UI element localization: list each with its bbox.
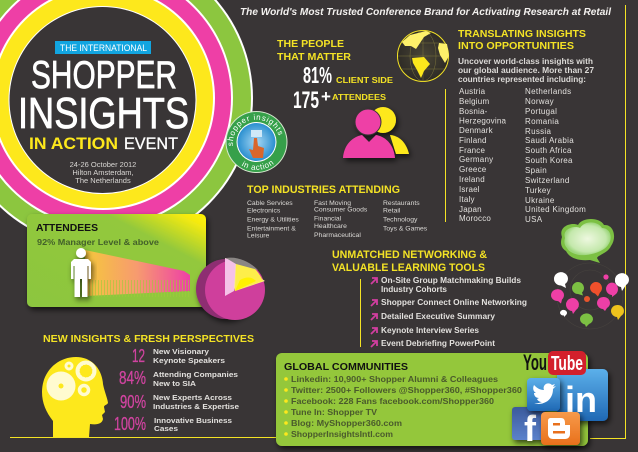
- event title: INSIGHTS: [18, 89, 189, 138]
- event title: SHOPPER: [31, 54, 177, 97]
- people gradient row: [85, 250, 190, 297]
- country list column 2: Saudi Arabia: [525, 136, 574, 145]
- icon: person: [71, 248, 91, 297]
- event date and venue: The Netherlands: [75, 176, 131, 185]
- community list: Tune In: Shopper TV: [291, 407, 377, 417]
- stats: new insights numbers: [114, 346, 146, 434]
- heading: unmatched networking: VALUABLE LEARNING TOOLS: [332, 262, 485, 274]
- country list column 1: Belgium: [459, 97, 489, 106]
- stats: new insights numbers: 90%: [120, 392, 146, 412]
- attendees heading: ATTENDEES: [36, 222, 98, 234]
- country list column 2: Norway: [525, 97, 554, 106]
- top strapline: The World's Most Trusted Conference Brand for Activating Research at Retail: [240, 6, 612, 18]
- country list column 2: Spain: [525, 166, 547, 175]
- heading: the people that matter: THE PEOPLE: [277, 38, 344, 50]
- logo roundel: concentric rings: [0, 0, 253, 248]
- stats: new insights numbers: 84%: [119, 368, 146, 388]
- industries column 2: Consumer Goods: [314, 206, 368, 214]
- industries column 3: [383, 200, 428, 232]
- country list column 1: Italy: [459, 195, 475, 204]
- stats: new insights labels: Keynote Speakers: [153, 356, 225, 365]
- heading: the people that matter: [277, 38, 351, 63]
- pie chart: [196, 258, 265, 320]
- badge: shopper insights in action: in action: [242, 160, 274, 170]
- stat: 175+ attendees: [293, 87, 387, 114]
- icon: twitter: [527, 378, 560, 411]
- country list column 1: Austria: [459, 87, 486, 96]
- country list column 1: Denmark: [459, 126, 494, 135]
- divider lines: [360, 5, 626, 438]
- stats: new insights labels: Cases: [154, 424, 178, 433]
- heading: unmatched networking: [332, 249, 487, 274]
- community list: Twitter: 2500+ Followers @Shopper360, #Shopper360: [291, 385, 522, 395]
- stat: 175+ attendees: 175: [293, 87, 319, 114]
- stats: new insights numbers: 100%: [114, 414, 146, 434]
- stat: 81% client side: 81%: [303, 62, 332, 88]
- badge: shopper insights in action: shopper insights: [227, 114, 282, 146]
- icon: youtube: You: [523, 350, 547, 375]
- badge: shopper insights in action: [226, 111, 288, 173]
- community list: Facebook: 228 Fans facebook.com/Shopper360: [291, 396, 494, 406]
- country list column 1: Finland: [459, 136, 487, 145]
- event title: EVENT: [124, 135, 178, 153]
- icon: green cloud: [561, 219, 614, 263]
- networking bullet list: Event Debriefing PowerPoint: [381, 339, 495, 348]
- heading: the people that matter: THAT MATTER: [277, 51, 351, 63]
- country list column 2: Romania: [525, 117, 559, 126]
- speech bubbles cluster: [551, 263, 629, 329]
- icon: head with gears: [42, 357, 108, 437]
- heading: translating insights: [458, 28, 586, 52]
- country list column 2: [525, 87, 586, 224]
- icon: facebook: [512, 407, 545, 449]
- stats: new insights labels: Industries & Expertise: [153, 402, 239, 411]
- networking bullet list: On-Site Group Matchmaking Builds: [381, 276, 522, 285]
- country list column 2: South Africa: [525, 146, 572, 155]
- event title: IN ACTION: [29, 135, 118, 153]
- country list column 1: Bosnia-: [459, 107, 488, 116]
- country list column 1: Japan: [459, 205, 482, 214]
- industries column 1: Entertainment &: [247, 226, 296, 232]
- country list column 2: United Kingdom: [525, 205, 586, 214]
- country list column 2: Ukraine: [525, 196, 555, 205]
- icon: youtube: Tube: [551, 353, 583, 375]
- industries column 2: Healthcare: [314, 223, 347, 230]
- country list column 1: Greece: [459, 165, 487, 174]
- industries column 3: Technology: [383, 216, 418, 224]
- global audience text: our global audience. More than 27: [458, 66, 595, 75]
- event title: [18, 41, 189, 153]
- industries column 1: Cable Services: [247, 200, 293, 207]
- industries column 1: Leisure: [247, 232, 270, 240]
- panel: global communities: [276, 353, 588, 446]
- country list column 2: USA: [525, 215, 543, 224]
- global audience text: Uncover world-class insights with: [458, 57, 593, 66]
- base line: [10, 436, 277, 438]
- global communities heading: GLOBAL COMMUNITIES: [284, 361, 408, 373]
- networking bullet list: Industry Cohorts: [381, 285, 448, 294]
- networking bullet list: Keynote Interview Series: [381, 326, 480, 335]
- global audience text: [458, 57, 595, 84]
- community list: Blog: MyShopper360.com: [291, 418, 402, 428]
- country list column 1: Morocco: [459, 214, 491, 223]
- global audience text: countries represented including:: [458, 75, 586, 84]
- heading: translating insights: TRANSLATING INSIGHTS: [458, 28, 586, 40]
- country list column 2: Turkey: [525, 186, 551, 195]
- community list: Linkedin: 10,900+ Shopper Alumni & Colleagues: [291, 374, 498, 384]
- icon: facebook: f: [524, 408, 537, 449]
- industries column 2: [314, 200, 368, 239]
- networking bullet list: [371, 276, 527, 348]
- heading: new insights: NEW INSIGHTS & FRESH PERSPECTIVES: [43, 333, 254, 345]
- country list column 2: Switzerland: [525, 176, 570, 185]
- stat: 81% client side: CLIENT SIDE: [336, 76, 394, 85]
- stats: new insights labels: Attending Companies: [153, 370, 238, 379]
- stats: new insights labels: Innovative Business: [154, 416, 232, 425]
- industries column 1: Electronics: [247, 208, 281, 214]
- country list column 2: Netherlands: [525, 87, 571, 96]
- heading: translating insights: INTO OPPORTUNITIES: [458, 40, 574, 52]
- stats: new insights numbers: 12: [132, 346, 145, 366]
- icon: linkedin: [557, 369, 608, 421]
- industries column 2: Pharmaceutical: [314, 232, 361, 239]
- icon: linkedin: in: [565, 379, 597, 420]
- country list column 2: Russia: [525, 127, 552, 136]
- country list column 1: [459, 87, 506, 223]
- stat: 175+ attendees: ATTENDEES: [332, 93, 387, 102]
- industries column 3: Retail: [383, 208, 401, 214]
- heading: unmatched networking: UNMATCHED NETWORKING &: [332, 249, 487, 261]
- icon: blogger: [541, 412, 580, 445]
- country list column 1: France: [459, 146, 485, 155]
- country list column 1: Ireland: [459, 175, 485, 184]
- country list column 1: Herzegovina: [459, 116, 506, 126]
- industries column 1: [247, 200, 299, 240]
- industries column 2: Fast Moving: [314, 200, 351, 207]
- icon: globe: [398, 30, 449, 82]
- country list column 1: Germany: [459, 155, 493, 164]
- manager level text: 92% Manager Level & above: [37, 237, 159, 247]
- icon: youtube: [523, 350, 586, 375]
- country list column 2: Portugal: [525, 107, 557, 116]
- stats: new insights labels: New Visionary: [153, 347, 210, 356]
- panel: attendees: [27, 214, 206, 307]
- event title: THE INTERNATIONAL: [60, 43, 147, 54]
- community list: [284, 374, 522, 439]
- community list: ShopperInsightsIntl.com: [291, 429, 393, 439]
- stats: new insights labels: [153, 347, 239, 433]
- heading: top industries: TOP INDUSTRIES ATTENDING: [247, 184, 400, 196]
- event date and venue: [70, 160, 136, 185]
- industries column 1: Energy & Utilities: [247, 216, 299, 224]
- country list column 2: South Korea: [525, 156, 573, 165]
- stats: new insights labels: New Experts Across: [153, 393, 232, 402]
- stat: 81% client side: [303, 62, 394, 88]
- networking bullet list: Shopper Connect Online Networking: [381, 298, 527, 307]
- stat: 175+ attendees: +: [321, 87, 331, 106]
- icon: people: [343, 107, 409, 158]
- event date and venue: Hilton Amsterdam,: [72, 168, 134, 177]
- industries column 3: Restaurants: [383, 200, 420, 207]
- event date and venue: 24-26 October 2012: [70, 160, 136, 169]
- networking bullet list: Detailed Executive Summary: [381, 312, 496, 321]
- stats: new insights labels: New to SIA: [153, 379, 197, 388]
- industries column 3: Toys & Games: [383, 226, 428, 232]
- country list column 1: Israel: [459, 185, 480, 194]
- industries column 2: Financial: [314, 216, 342, 222]
